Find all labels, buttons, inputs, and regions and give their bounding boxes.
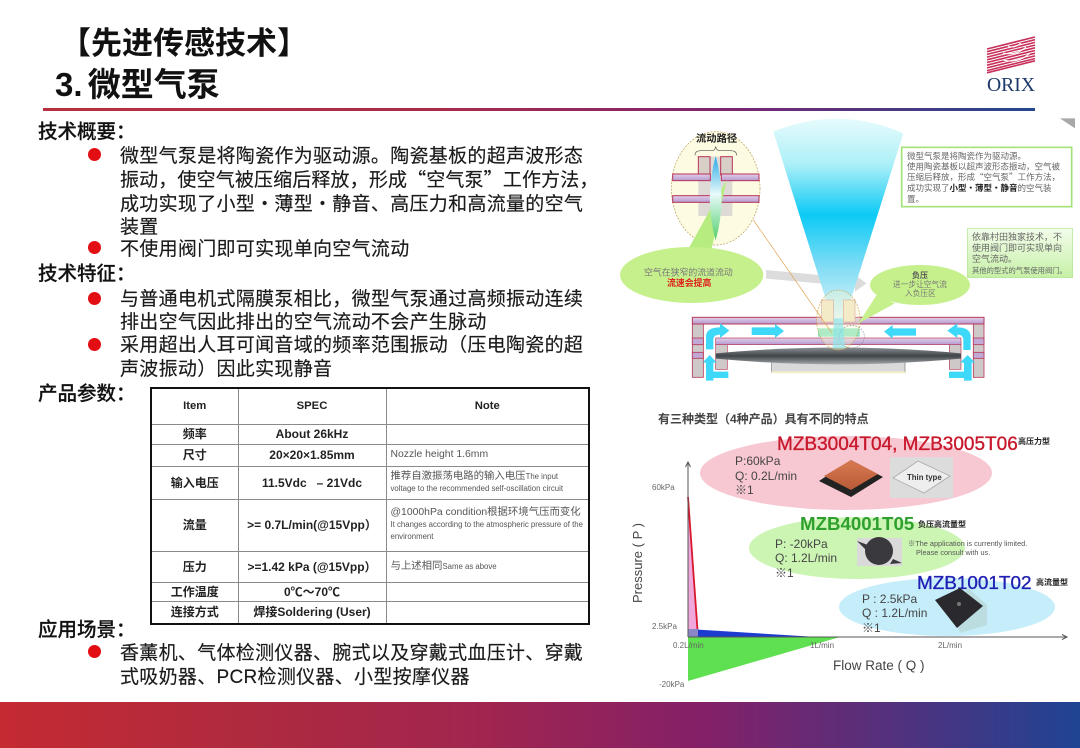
table: product specifications bbox=[150, 387, 590, 625]
area: negative pressure region bbox=[688, 637, 840, 681]
text: exclusive technology: 其他的型式的气泵使用阀门。 bbox=[972, 266, 1067, 275]
title: section heading: 【先进传感技术】 bbox=[60, 26, 308, 61]
model title: MZB3004T04 MZB3005T06: MZB3004T04, MZB3005T06 bbox=[777, 434, 1018, 455]
text: exclusive technology bbox=[972, 231, 1067, 275]
nozzle cyan core bbox=[833, 318, 845, 348]
type label: negative pressure: 负压高流量型 bbox=[918, 519, 966, 529]
icon: round black pump bbox=[857, 537, 902, 566]
bubble: negative pressure bbox=[858, 265, 970, 323]
note: limited application: ※The application is currently limited. bbox=[908, 539, 1027, 548]
top plate bbox=[692, 317, 984, 324]
table: product specifications: 输入电压 bbox=[171, 476, 219, 490]
specs: high flow: ※1 bbox=[862, 621, 881, 635]
inner supports bbox=[716, 345, 961, 369]
table: product specifications: Note bbox=[475, 400, 500, 412]
table: product specifications: 20×20×1.85mm bbox=[269, 448, 355, 462]
table: product specifications: It changes according to the atmospheric pressure of the environment bbox=[390, 520, 583, 541]
text: pump description: 微型气泵是将陶瓷作为驱动源。 bbox=[907, 151, 1026, 161]
label: flow speed increases: 流速会提高 bbox=[667, 277, 711, 288]
ellipse: high flow type bbox=[839, 578, 1055, 636]
dashed small ellipse bbox=[839, 325, 864, 348]
nozzle magnified area bbox=[817, 290, 864, 350]
text block: overview bullets: 装置 bbox=[120, 217, 159, 238]
inset plates bbox=[673, 174, 759, 202]
text: pump description: 使用陶瓷基板以超声波形态振动，空气被 bbox=[907, 162, 1061, 172]
bullet: applications bbox=[88, 645, 101, 658]
arrow curved top left bbox=[706, 323, 729, 349]
icon: thin type module bbox=[890, 457, 953, 498]
diagram: pump cross-section and airflow bbox=[620, 118, 1075, 381]
arrow curved top right bbox=[947, 323, 971, 350]
axis title: flow rate: Flow Rate ( Q ) bbox=[833, 658, 925, 673]
table: product specifications: >=1.42 kPa (@15Vpp） bbox=[247, 560, 377, 574]
chart: pressure vs flow rate product map bbox=[630, 411, 1068, 689]
table: product specifications: 工作温度 bbox=[171, 584, 219, 598]
table: product specifications: 与上述相同Same as above bbox=[390, 560, 497, 572]
table: product specifications: Item bbox=[183, 400, 206, 412]
arrow right bbox=[752, 324, 784, 338]
icon: square black pump bbox=[935, 588, 987, 633]
label: flow path: 流动路径 bbox=[696, 132, 737, 145]
label: narrow channel text: 空气在狭窄的流道流动 bbox=[644, 266, 733, 278]
table: product specifications: SPEC bbox=[297, 400, 327, 412]
bullet: first feature point bbox=[88, 292, 101, 305]
icon: thin type module: Thin type bbox=[907, 473, 942, 482]
table: product specifications: About 26kHz bbox=[276, 427, 348, 441]
text: pump description: 置。 bbox=[907, 194, 924, 204]
nozzle blocks bbox=[822, 300, 855, 322]
table: product specifications: 11.5Vdc – 21Vdc bbox=[262, 476, 362, 490]
text block: overview bullets: 成功实现了小型・薄型・静音、高压力和高流量的空气 bbox=[120, 194, 583, 215]
table: product specifications: 压力 bbox=[183, 560, 207, 574]
inset ellipse bbox=[671, 132, 760, 245]
text: exclusive technology: 依靠村田独家技术，不 bbox=[972, 231, 1062, 242]
table: product specifications: 流量 bbox=[183, 518, 207, 532]
icon: ORIX logo bbox=[986, 36, 1036, 94]
right wall bbox=[973, 324, 984, 377]
text: pump description: 压缩后释放，形成“空气泵”工作方法， bbox=[907, 171, 1060, 183]
brace bbox=[695, 147, 737, 155]
icon: orange chip bbox=[819, 460, 883, 497]
table: product specifications: 频率 bbox=[183, 427, 207, 441]
axis tick labels: 1L/min bbox=[810, 641, 834, 650]
heading: application scenarios: 应用场景： bbox=[38, 619, 136, 641]
pump body bbox=[692, 317, 984, 377]
label: negative pressure: 负压 bbox=[912, 270, 928, 280]
table: product specifications: voltage to the recommended self-oscillation circuit bbox=[390, 484, 563, 492]
arrow lower right bbox=[949, 355, 975, 381]
left wall bbox=[692, 324, 703, 377]
teal flow region bbox=[818, 328, 860, 337]
table: product specifications: 推荐自激振荡电路的输入电压The input bbox=[390, 470, 558, 482]
table: product specifications: 0℃～70℃ bbox=[284, 584, 340, 598]
text: exclusive technology: 使用阀门即可实现单向 bbox=[972, 242, 1062, 253]
axis tick labels: 60kPa bbox=[652, 483, 675, 492]
text block: feature bullets: 排出空气因此排出的空气流动不会产生脉动 bbox=[120, 312, 487, 333]
model title: MZB1001T02: MZB1001T02 bbox=[917, 573, 1031, 594]
fan: airflow jet bbox=[773, 119, 903, 323]
specs: high pressure: Q: 0.2L/min bbox=[735, 469, 797, 483]
bullet: first overview point bbox=[88, 148, 101, 161]
text block: application bullet: 式吸奶器、PCR检测仪器、小型按摩仪器 bbox=[120, 667, 470, 688]
specs: high pressure: P:60kPa bbox=[735, 454, 781, 468]
callout box: no valve bbox=[967, 228, 1073, 278]
inset: magnified flow channel bbox=[671, 132, 760, 245]
text block: application bullet: 香薰机、气体检测仪器、腕式以及穿戴式血压计、穿戴 bbox=[120, 643, 583, 664]
type label: high flow: 高流量型 bbox=[1036, 577, 1068, 587]
title: 3. micro air pump: 3. 微型气泵 bbox=[55, 66, 220, 103]
specs: high flow: Q : 1.2L/min bbox=[862, 606, 927, 620]
table: product specifications: 尺寸 bbox=[183, 448, 207, 462]
area: high flow region bbox=[688, 629, 817, 637]
axis title: pressure: Pressure ( P ) bbox=[630, 523, 645, 603]
text block: overview bullets: 振动，使空气被压缩后释放，形成“空气泵”工作方法， bbox=[120, 165, 599, 192]
specs: high pressure bbox=[735, 454, 797, 497]
bullet: second feature point bbox=[88, 338, 101, 351]
axis tick labels bbox=[652, 483, 962, 689]
table: product specifications: >= 0.7L/min(@15Vpp） bbox=[247, 518, 377, 532]
label: negative pressure: 入负压区 bbox=[905, 288, 936, 298]
table: product specifications: 连接方式 bbox=[171, 605, 219, 619]
text block: overview bullets: 不使用阀门即可实现单向空气流动 bbox=[120, 239, 410, 260]
specs: negative pressure: ※1 bbox=[775, 566, 794, 580]
axis tick labels: 2.5kPa bbox=[652, 622, 677, 631]
table: product specifications: 焊接Soldering (User) bbox=[253, 605, 371, 619]
bubble: narrow channel bbox=[620, 180, 763, 303]
arrow: large gray direction arrow bbox=[766, 270, 867, 292]
bullet: second overview point bbox=[88, 241, 101, 254]
specs: negative pressure: P: -20kPa bbox=[775, 537, 828, 551]
line: high pressure curve bbox=[688, 497, 698, 637]
text: pump description bbox=[907, 151, 1061, 204]
area: high pressure region bbox=[688, 497, 698, 637]
label: negative pressure: 进一步让空气流 bbox=[893, 279, 947, 289]
label: negative pressure bbox=[893, 270, 947, 298]
chart heading: 有三种类型（4种产品）具有不同的特点 bbox=[658, 411, 869, 426]
text block: feature bullets: 与普通电机式隔膜泵相比，微型气泵通过高频振动连续 bbox=[120, 289, 583, 310]
note: limited application: Please consult with us. bbox=[916, 548, 990, 557]
gray backing bbox=[698, 157, 732, 216]
nozzle walls bbox=[698, 157, 732, 175]
ellipse: high pressure type bbox=[700, 436, 992, 510]
heading: product parameters: 产品参数： bbox=[38, 383, 136, 405]
ellipse: negative pressure type bbox=[749, 517, 965, 579]
arrows: air flow cyan bbox=[703, 323, 975, 381]
text block: feature bullets bbox=[88, 288, 583, 380]
specs: high flow bbox=[862, 592, 927, 635]
flow lens gradient bbox=[710, 156, 721, 241]
arrow lower left bbox=[703, 355, 728, 381]
table: product specifications: @1000hPa condition根据环境气压而变化 bbox=[390, 507, 581, 518]
specs: negative pressure: Q: 1.2L/min bbox=[775, 551, 837, 565]
callout box: description bbox=[902, 147, 1072, 207]
text block: overview bullets bbox=[88, 146, 599, 260]
specs: negative pressure bbox=[775, 537, 837, 580]
table: product specifications: Nozzle height 1.6mm bbox=[390, 449, 488, 460]
overlap region bbox=[688, 629, 698, 637]
note: limited application bbox=[908, 539, 1027, 557]
heading: technology overview: 技术概要： bbox=[38, 121, 136, 143]
axis: pressure bbox=[686, 462, 690, 637]
text block: application bullet bbox=[88, 642, 583, 688]
text block: feature bullets: 采用超出人耳可闻音域的频率范围振动（压电陶瓷的超 bbox=[120, 335, 583, 356]
arrow left bbox=[884, 325, 916, 339]
text: exclusive technology: 空气流动。 bbox=[972, 253, 1017, 264]
vibrating disk bbox=[716, 347, 961, 364]
axis: flow rate bbox=[688, 634, 1067, 640]
footer gradient band bbox=[0, 702, 1080, 748]
axis tick labels: -20kPa bbox=[659, 680, 685, 689]
inner plate bbox=[716, 338, 961, 345]
header divider line bbox=[43, 108, 1035, 110]
axis tick labels: 0.2L/min bbox=[673, 641, 704, 650]
icon: gray corner triangle bbox=[1060, 118, 1075, 128]
specs: high pressure: ※1 bbox=[735, 483, 754, 497]
text block: overview bullets: 微型气泵是将陶瓷作为驱动源。陶瓷基板的超声波形态 bbox=[120, 146, 583, 167]
lower piezo ceramic bbox=[772, 361, 905, 373]
type label: high pressure: 高压力型 bbox=[1018, 436, 1050, 446]
heading: technology features: 技术特征： bbox=[38, 263, 136, 285]
dashed highlight ellipse bbox=[817, 290, 860, 350]
model title: MZB4001T05: MZB4001T05 bbox=[800, 513, 914, 534]
axis tick labels: 2L/min bbox=[938, 641, 962, 650]
text block: feature bullets: 声波振动）因此实现静音 bbox=[120, 359, 332, 380]
leader line: inset to nozzle bbox=[753, 220, 832, 333]
specs: high flow: P : 2.5kPa bbox=[862, 592, 917, 606]
text: pump description: 成功实现了小型・薄型・静音的空气装 bbox=[907, 183, 1052, 193]
